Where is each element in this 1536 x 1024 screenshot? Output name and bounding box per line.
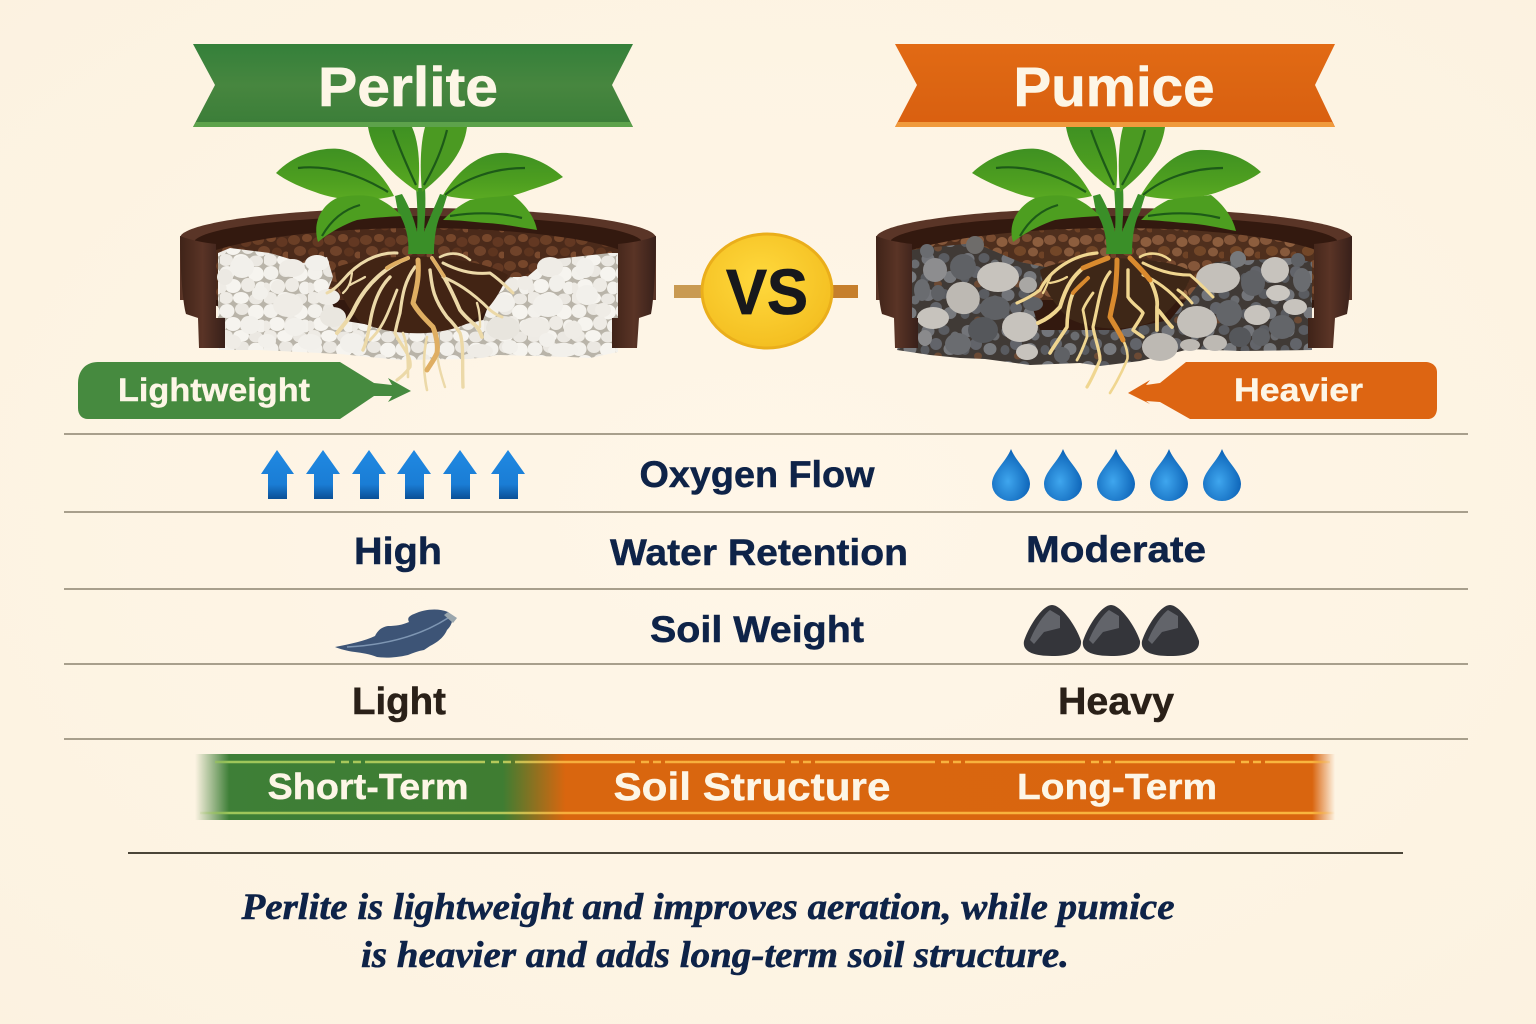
pot back rim <box>876 208 1352 300</box>
tag: Heavier <box>1128 362 1437 419</box>
summary caption: Perlite is lightweight and improves aeration, while pumice <box>240 887 1175 928</box>
bar: Soil Structure strip <box>195 754 1335 820</box>
label: Lightweight: Lightweight <box>118 372 310 408</box>
label: Heavier: Heavier <box>1234 372 1363 408</box>
plant: Pumice <box>972 127 1261 254</box>
pot illustration: Perlite <box>180 208 656 390</box>
banner: Perlite <box>193 44 633 127</box>
tag: Lightweight <box>78 362 411 419</box>
soil layer <box>216 228 620 300</box>
label: Moderate: Moderate <box>1026 529 1206 570</box>
label: Water Retention: Water Retention <box>610 532 908 573</box>
roots <box>327 253 513 390</box>
icon: three stones <box>1024 605 1199 656</box>
plant: Perlite <box>276 127 563 254</box>
icon: six blue oxygen arrows <box>261 450 525 499</box>
dark soil around roots <box>1040 258 1192 328</box>
summary caption: is heavier and adds long-term soil structure. <box>361 935 1069 976</box>
label: Soil Weight: Soil Weight <box>650 609 864 650</box>
soil layer <box>912 228 1316 300</box>
banner: Pumice <box>895 44 1335 127</box>
label: Heavy: Heavy <box>1058 681 1174 723</box>
label: Oxygen Flow: Oxygen Flow <box>640 454 875 495</box>
VS badge <box>674 234 858 348</box>
heading: Perlite: Perlite <box>318 55 498 118</box>
roots <box>1017 253 1213 393</box>
text: VS: VS <box>726 256 808 328</box>
label: High: High <box>354 531 442 573</box>
icon: feather <box>335 610 457 658</box>
pot front walls <box>876 236 918 348</box>
pot illustration: Pumice <box>876 208 1352 393</box>
text: Long-Term: Long-Term <box>1017 766 1217 807</box>
heading: Pumice: Pumice <box>1014 55 1214 118</box>
pot back rim <box>180 208 656 300</box>
dark soil around roots <box>335 257 508 333</box>
text: Short-Term: Short-Term <box>268 766 468 807</box>
summary caption <box>240 887 1175 976</box>
perlite pebbles <box>217 248 618 360</box>
pumice stones <box>897 236 1312 366</box>
icon: five water drops <box>992 449 1241 501</box>
table dividers <box>64 434 1468 739</box>
text: Soil Structure: Soil Structure <box>614 766 890 809</box>
pot front walls <box>180 236 225 348</box>
label: Light: Light <box>352 681 446 723</box>
